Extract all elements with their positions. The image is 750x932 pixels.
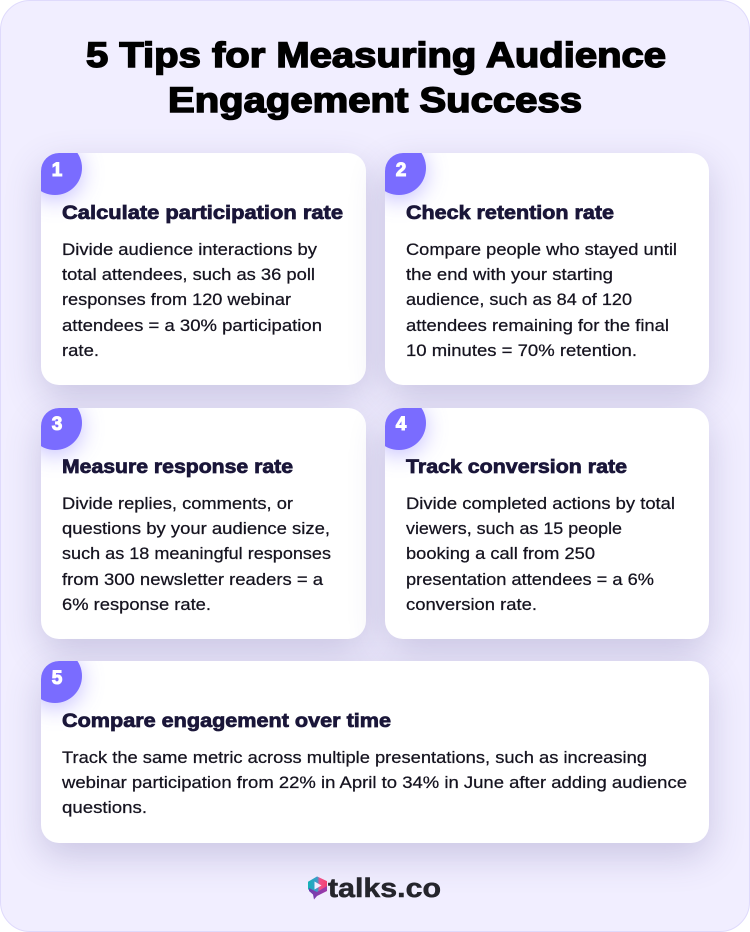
heading: measure response rate: Measure response rate	[62, 456, 293, 478]
text: tip 2 description: audience, such as 84 of 120	[406, 290, 632, 309]
text: tip 3 description: such as 18 meaningful responses	[62, 544, 331, 563]
text: tip 2 description	[406, 240, 677, 360]
panel: tip 4	[385, 408, 709, 639]
heading: calculate participation rate: Calculate participation rate	[62, 202, 343, 224]
panel: tip 3	[41, 408, 366, 639]
text: tip 2 description: Compare people who stayed until	[406, 240, 677, 259]
number 2: 2	[396, 160, 406, 181]
text: tip 1 description: responses from 120 webinar	[62, 290, 291, 309]
badge: number 4	[372, 396, 426, 450]
panel: tip 5	[41, 661, 709, 843]
badge: number 1	[28, 141, 82, 195]
panel: tip 1	[41, 153, 366, 385]
number 3: 3	[52, 414, 62, 435]
text: tip 2 description: the end with your starting	[406, 265, 613, 284]
text: tip 4 description: Divide completed actions by total	[406, 494, 675, 513]
wordmark: talks.co	[328, 873, 441, 903]
text: tip 5 description	[61, 748, 687, 817]
text: tip 2 description: 10 minutes = 70% retention.	[406, 341, 637, 360]
text: tip 3 description: questions by your audience size,	[62, 519, 330, 538]
title: 5 Tips for Measuring Audience	[86, 36, 666, 75]
text: tip 3 description: from 300 newsletter readers = a	[62, 570, 324, 589]
text: tip 1 description: Divide audience interactions by	[62, 240, 318, 259]
badge: number 2	[372, 141, 426, 195]
text: tip 5 description: webinar participation from 22% in April to 34% in June after adding audience	[61, 773, 687, 792]
text: tip 4 description: viewers, such as 15 people	[406, 519, 622, 538]
text: tip 4 description: conversion rate.	[406, 595, 537, 614]
number 4: 4	[396, 414, 407, 435]
heading: compare engagement over time: Compare engagement over time	[62, 710, 391, 732]
number 1: 1	[52, 160, 63, 181]
text: tip 1 description: rate.	[62, 341, 99, 360]
text: tip 1 description: attendees = a 30% participation	[62, 316, 322, 335]
text: tip 4 description	[406, 494, 675, 614]
text: tip 4 description: presentation attendees = a 6%	[406, 570, 654, 589]
panel: tip 2	[385, 153, 709, 385]
heading: track conversion rate: Track conversion rate	[406, 456, 627, 478]
text: tip 5 description: Track the same metric across multiple presentations, such as increasing	[62, 748, 647, 767]
badge: number 5	[28, 649, 82, 703]
text: tip 5 description: questions.	[62, 798, 147, 817]
text: tip 3 description: 6% response rate.	[62, 595, 211, 614]
badge: number 3	[28, 396, 82, 450]
text: tip 1 description: total attendees, such as 36 poll	[62, 265, 315, 284]
text: tip 4 description: booking a call from 250	[406, 544, 595, 563]
number 5: 5	[52, 668, 63, 689]
title	[86, 36, 666, 120]
text: tip 3 description: Divide replies, comments, or	[62, 494, 293, 513]
text: tip 2 description: attendees remaining for the final	[406, 316, 669, 335]
text: tip 3 description	[62, 494, 331, 614]
icon: talks.co play bubble	[308, 877, 327, 900]
title: Engagement Success	[168, 81, 582, 120]
text: tip 1 description	[62, 240, 322, 360]
heading: check retention rate: Check retention rate	[406, 202, 614, 224]
